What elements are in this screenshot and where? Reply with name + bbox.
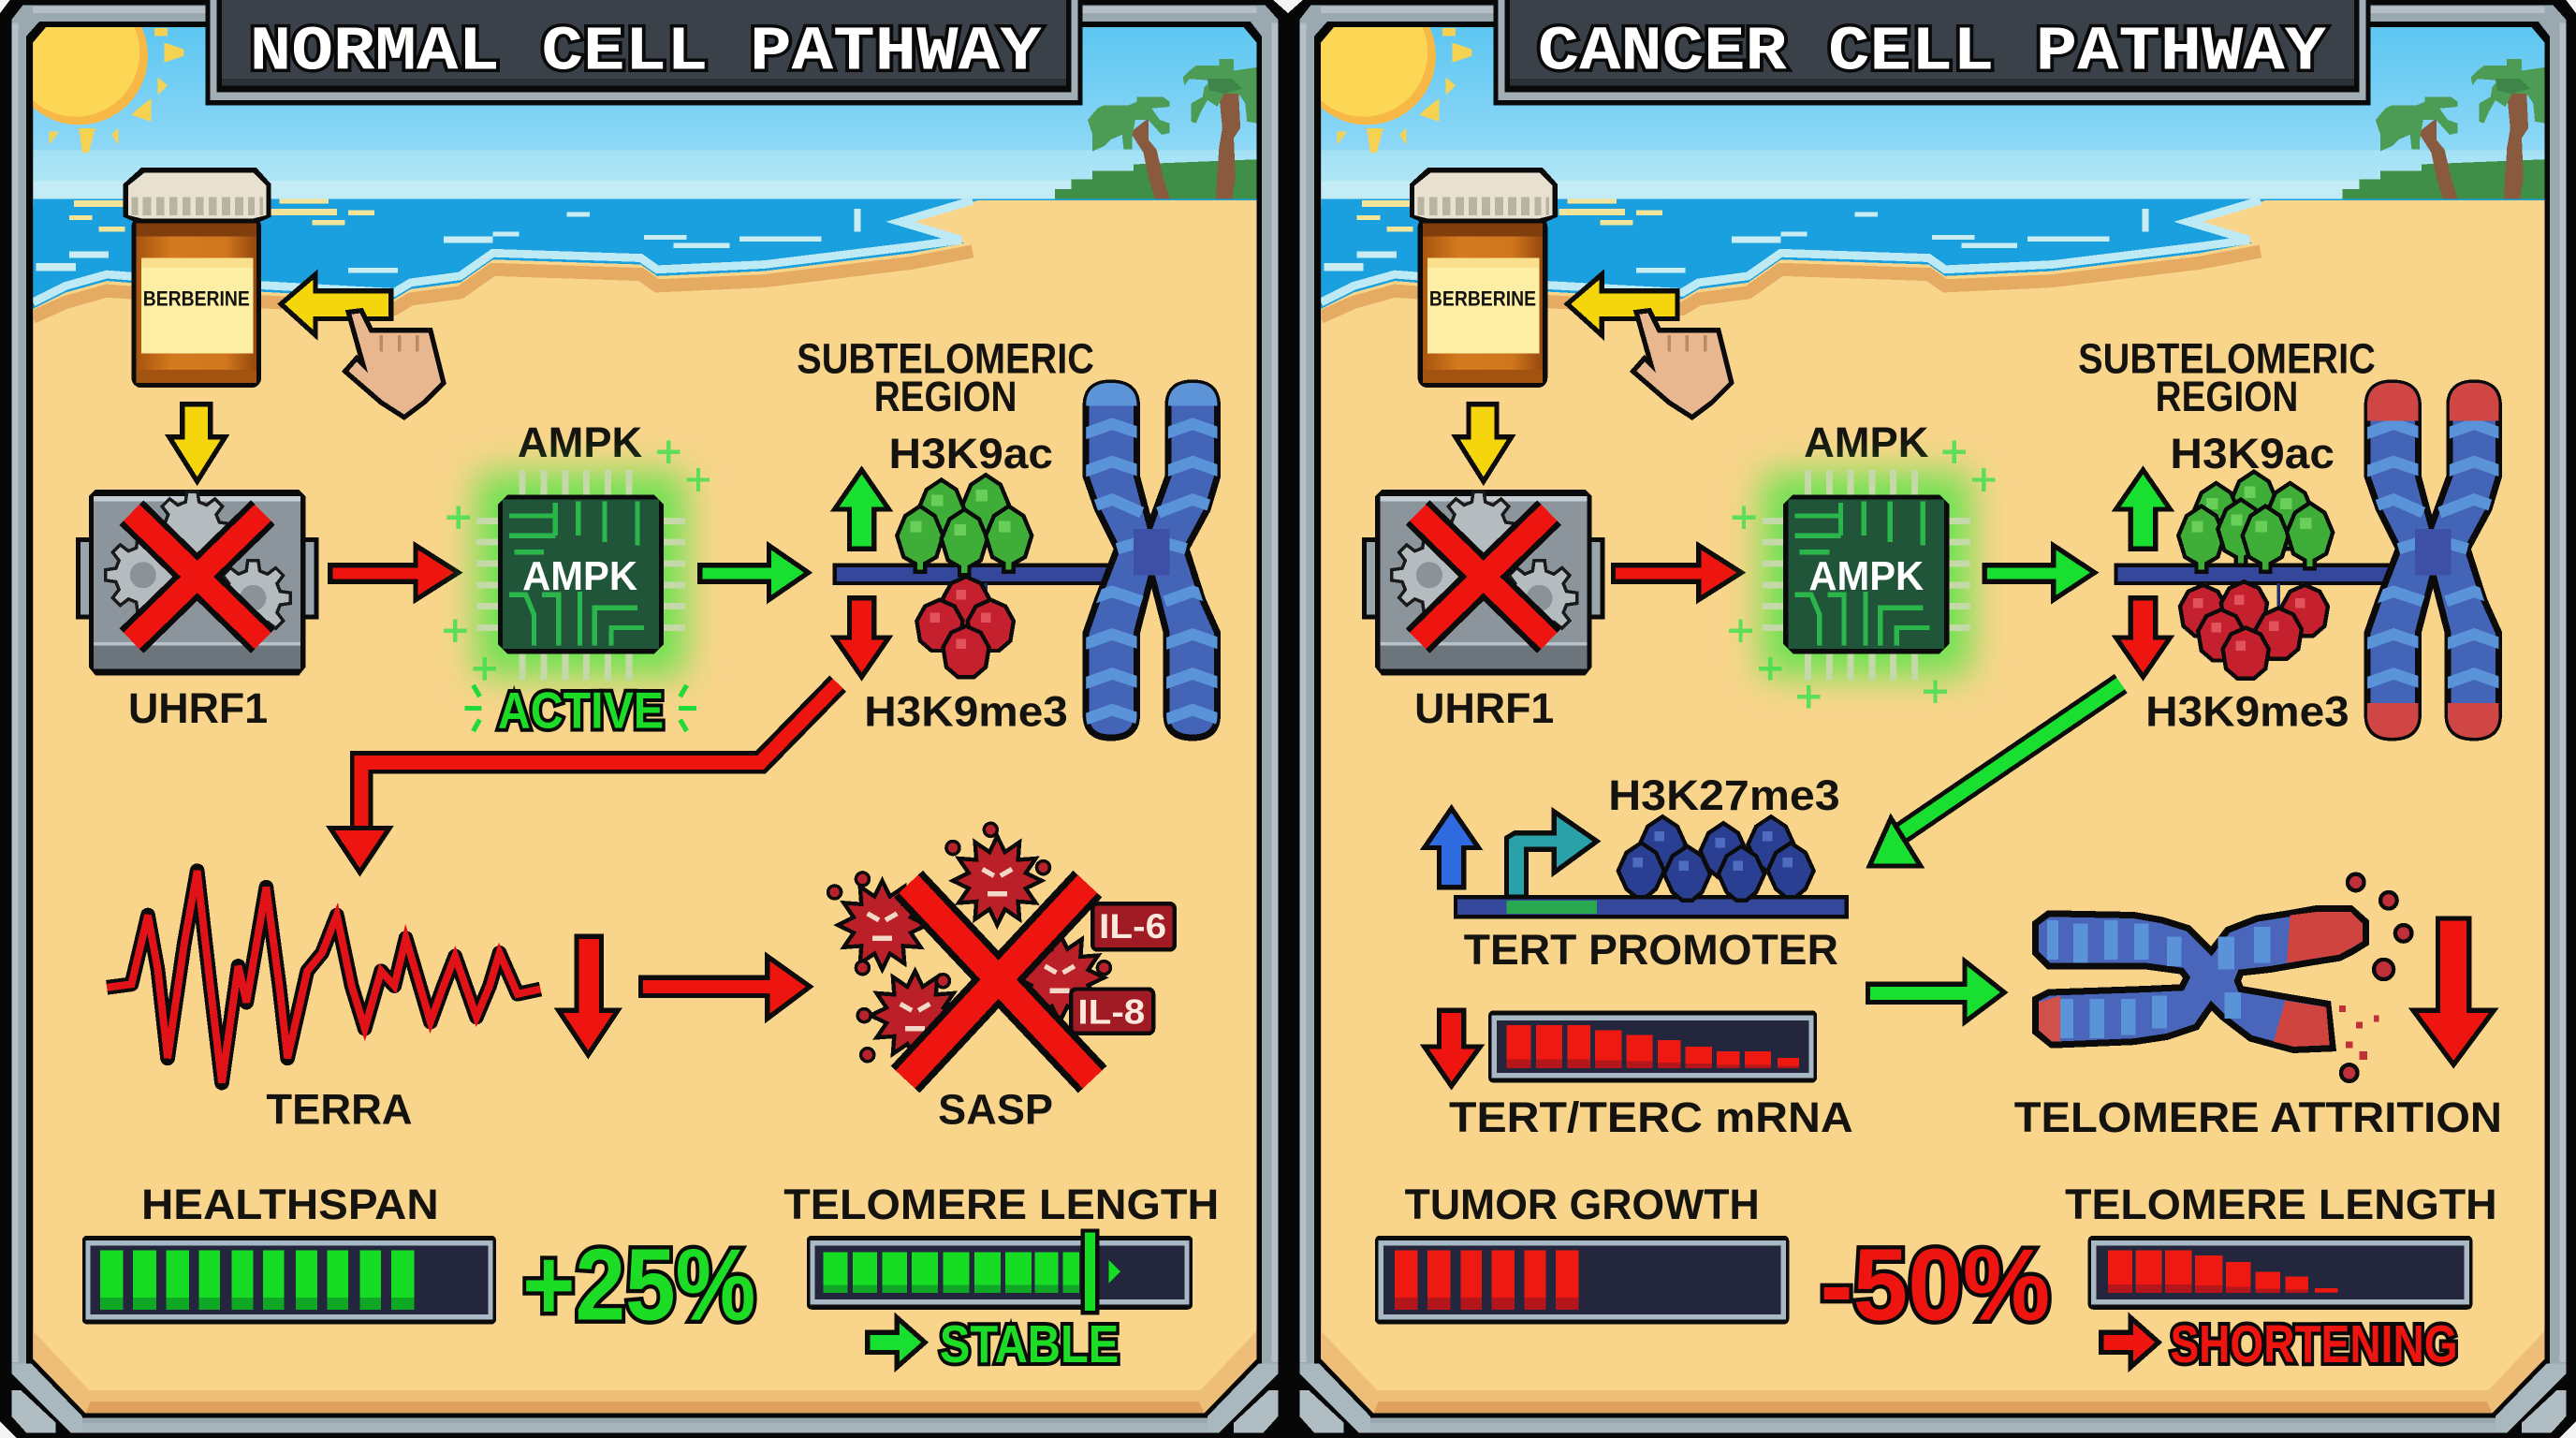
title plaque: NORMAL CELL PATHWAY	[250, 18, 1042, 89]
arrow: green to attrition	[1868, 961, 2004, 1022]
chromatin bar	[835, 565, 1110, 583]
label: tumor growth: TUMOR GROWTH	[1405, 1181, 1760, 1228]
arrow: TERRA decreased	[559, 936, 618, 1055]
status: stable	[868, 1314, 1119, 1373]
arrow: red to SASP	[641, 956, 810, 1019]
title plaque	[1493, 0, 2371, 105]
stat: -50%: -50%	[1821, 1227, 2050, 1342]
label: TERRA: TERRA	[266, 1085, 413, 1133]
label: subtelomeric region	[797, 334, 1094, 420]
arrow: mRNA decreased	[1425, 1010, 1480, 1086]
arrow: yellow pointing to bottle	[281, 274, 391, 335]
chromatin bar	[2116, 565, 2392, 583]
label: H3K9ac: H3K9ac	[889, 430, 1053, 477]
label: subtelomeric region	[2078, 334, 2376, 420]
label: TERT/TERC mRNA: TERT/TERC mRNA	[1449, 1093, 1853, 1141]
arrow: yellow down to UHRF1	[1456, 404, 1512, 481]
bar: tumor growth	[1375, 1236, 1789, 1325]
arrow: H3K9me3 down	[2116, 598, 2170, 677]
label: H3K9me3: H3K9me3	[2145, 688, 2349, 736]
arrow: H3K9ac up	[835, 470, 889, 549]
arrow: green to histones	[700, 546, 809, 600]
icon: berberine bottle: BERBERINE	[1429, 286, 1536, 310]
icon: AMPK chip	[444, 440, 710, 681]
label: H3K9me3: H3K9me3	[864, 688, 1068, 736]
icon: pointing hand	[345, 311, 444, 418]
icon: berberine bottle	[124, 168, 271, 388]
panel: cancer cell pathway	[1298, 0, 2566, 1432]
icon: green H3K9ac nucleosomes	[897, 475, 1032, 575]
arrow: green diagonal to TERT promoter	[1869, 683, 2121, 866]
tag: IL-6	[1092, 903, 1175, 949]
tag: IL-8	[1071, 990, 1153, 1034]
arrow: red to AMPK	[330, 546, 459, 600]
arrow: yellow down to UHRF1	[169, 404, 225, 481]
label: subtelomeric region: SUBTELOMERIC	[797, 334, 1094, 382]
label: UHRF1: UHRF1	[1414, 684, 1554, 732]
label: SASP: SASP	[938, 1085, 1053, 1133]
label: telomere length: TELOMERE LENGTH	[783, 1181, 1219, 1228]
label: telomere length: TELOMERE LENGTH	[2065, 1181, 2497, 1228]
chart: TERRA waveform	[107, 871, 540, 1083]
label: H3K27me3: H3K27me3	[1608, 771, 1840, 819]
status: shortening	[2101, 1314, 2458, 1373]
icon: SASP cytokines crossed out	[828, 823, 1110, 1079]
label: healthspan: HEALTHSPAN	[141, 1181, 439, 1228]
label: telomere attrition: TELOMERE ATTRITION	[2014, 1093, 2502, 1141]
title plaque: CANCER CELL PATHWAY	[1538, 18, 2326, 89]
tag: IL-6: IL-6	[1099, 907, 1166, 946]
icon: AMPK chip	[1729, 440, 1996, 708]
arrow: H3K9ac up	[2116, 470, 2170, 549]
label: subtelomeric region: REGION	[2156, 373, 2298, 420]
title plaque	[205, 0, 1083, 105]
icon: red H3K9me3 nucleosomes	[916, 577, 1014, 677]
icon: UHRF1 crossed out	[1362, 490, 1605, 675]
label: AMPK: AMPK	[1804, 418, 1929, 466]
icon: berberine bottle	[1410, 168, 1558, 388]
stat: +25%: +25%	[522, 1227, 755, 1342]
status: stable: STABLE	[940, 1314, 1119, 1373]
arrow: red to AMPK	[1613, 546, 1741, 600]
arrow: red elbow to TERRA	[330, 683, 838, 873]
bar: healthspan	[82, 1236, 496, 1325]
label: subtelomeric region: REGION	[874, 373, 1017, 420]
arrow: teal transcription start	[1506, 812, 1597, 897]
status: shortening: SHORTENING	[2170, 1314, 2458, 1373]
beach background and metal frame	[10, 0, 1278, 1432]
arrow: blue up	[1425, 808, 1479, 888]
DNA promoter bar	[1456, 897, 1847, 917]
tag: IL-8: IL-8	[1077, 992, 1145, 1031]
bar: telomere length shortening	[2088, 1236, 2472, 1310]
arrow: green to histones	[1984, 546, 2095, 600]
label: TERT promoter: TERT PROMOTER	[1464, 926, 1838, 974]
arrow: H3K9me3 down	[835, 598, 889, 677]
label: AMPK: AMPK	[518, 418, 642, 466]
icon: pointing hand	[1633, 311, 1732, 418]
icon: chromosome	[1084, 383, 1221, 738]
status: active: ACTIVE	[498, 682, 664, 739]
panel: normal cell pathway	[10, 0, 1278, 1432]
arrow: yellow pointing to bottle	[1567, 274, 1677, 335]
icon: berberine bottle: BERBERINE	[143, 286, 250, 310]
icon: UHRF1 crossed out	[76, 490, 319, 675]
icon: telomere fragments	[2339, 874, 2411, 1081]
bar: TERT/TERC mRNA	[1488, 1010, 1817, 1083]
icon: AMPK chip: AMPK	[522, 553, 637, 599]
icon: AMPK chip: AMPK	[1808, 553, 1925, 599]
bar: telomere length stable	[807, 1231, 1193, 1313]
icon: broken chromosome	[2036, 909, 2365, 1049]
icon: blue H3K27me3 nucleosomes	[1618, 816, 1814, 901]
arrow: telomere attrition down	[2413, 918, 2494, 1064]
label: H3K9ac: H3K9ac	[2170, 430, 2334, 477]
icon: red H3K9me3 nucleosomes	[2180, 581, 2328, 679]
icon: chromosome with red telomere caps	[2365, 381, 2504, 740]
beach background and metal frame	[1298, 0, 2566, 1432]
icon: green H3K9ac nucleosomes	[2178, 472, 2333, 572]
label: UHRF1: UHRF1	[128, 684, 268, 732]
label: subtelomeric region: SUBTELOMERIC	[2078, 334, 2376, 382]
